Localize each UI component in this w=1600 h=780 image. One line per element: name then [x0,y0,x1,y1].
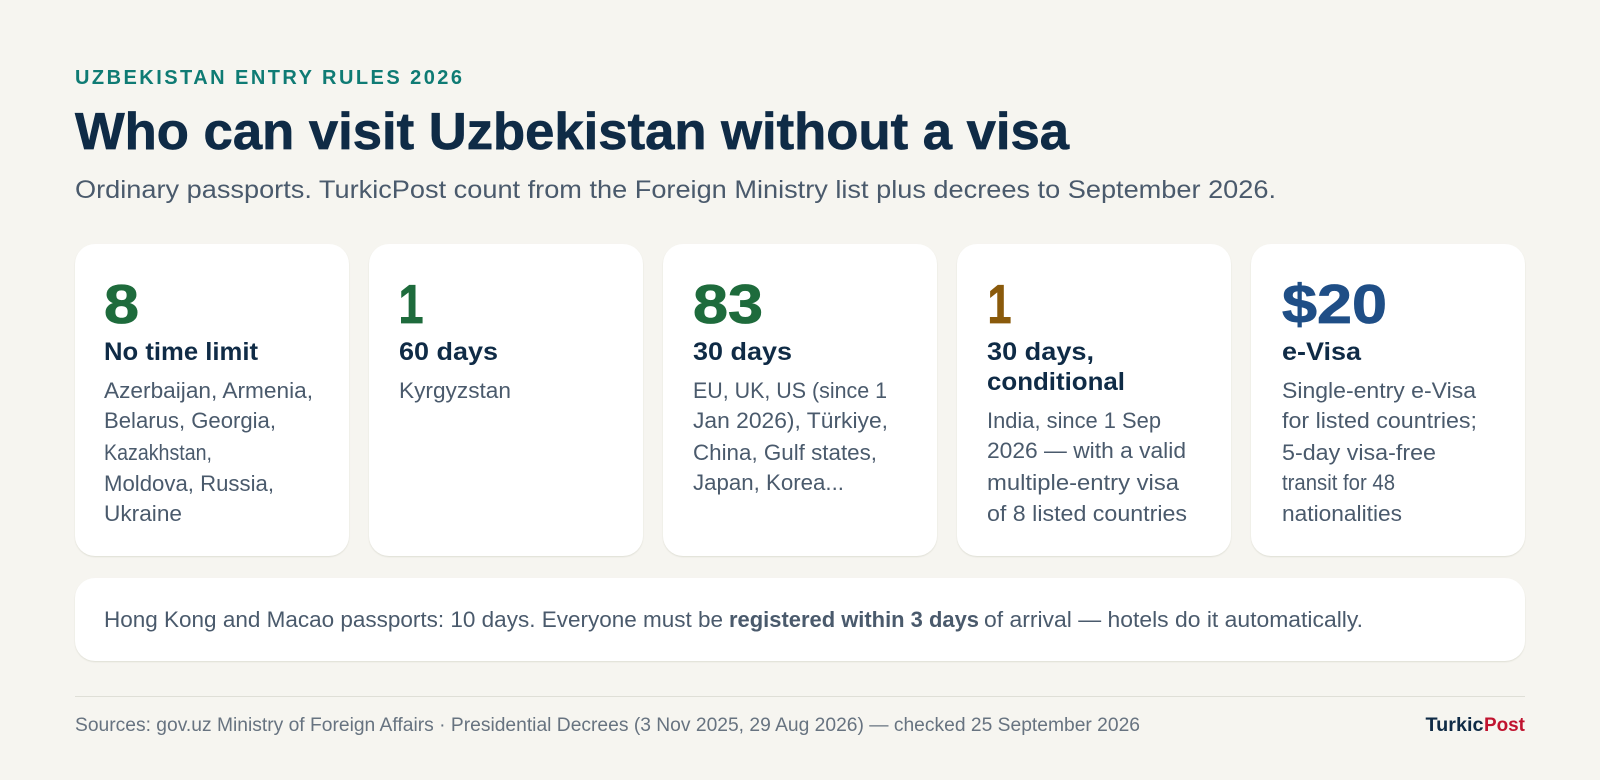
country list: Jan 2026), Türkiye, [693,408,888,433]
stat: 8: 8 [104,273,139,335]
title: Who can visit Uzbekistan without a visa [75,103,1070,161]
note text: registered within 3 days [729,607,979,632]
country list: Japan, Korea... [693,470,844,495]
country list: Belarus, Georgia, [104,408,276,433]
country list [693,378,888,495]
logo: TurkicPost: Turkic [1426,715,1484,736]
e-Visa text [1282,378,1477,526]
panel: 60 days [369,244,643,556]
stat: 1 conditional: 1 [988,273,1012,335]
heading: no time limit: No time limit [104,338,259,366]
heading: 60 days: 60 days [399,338,498,366]
conditions text: India, since 1 Sep [987,408,1161,433]
e-Visa text: transit for 48 [1282,470,1395,495]
note text: Hong Kong and Macao passports: 10 days. Everyone must be [104,607,723,632]
stat: $20: $20 [1282,273,1387,335]
heading: 30 days: 30 days [693,338,792,366]
panel: registration note [75,578,1525,661]
heading: 30 days, conditional [987,338,1125,396]
heading: 30 days, conditional: conditional [987,368,1125,396]
note text [104,607,1363,632]
logo: TurkicPost: Post [1484,715,1526,736]
e-Visa text: nationalities [1282,501,1402,526]
note text: of arrival — hotels do it automatically. [984,607,1363,632]
panel: 30 days conditional [957,244,1231,556]
conditions text: multiple-entry visa [987,470,1180,495]
panel: 30 days [663,244,937,556]
country list: Ukraine [104,501,182,526]
conditions text [987,408,1187,526]
panel: e-Visa [1251,244,1525,556]
country list: Kyrgyzstan [399,378,511,403]
eyebrow: UZBEKISTAN ENTRY RULES 2026 [75,67,462,89]
stat: 1: 1 [398,273,424,335]
country list: China, Gulf states, [693,440,877,465]
stat: 83: 83 [693,273,763,335]
e-Visa text: for listed countries; [1282,408,1477,433]
conditions text: 2026 — with a valid [987,438,1186,463]
subtitle: Ordinary passports. TurkicPost count from the Foreign Ministry list plus decrees to September 2026. [75,176,1276,204]
conditions text: of 8 listed countries [987,501,1187,526]
country list: Moldova, Russia, [104,471,274,496]
e-Visa text: Single-entry e-Visa [1282,378,1477,403]
e-Visa text: 5-day visa-free [1282,440,1436,465]
heading: e-Visa: e-Visa [1282,338,1362,366]
country list [104,378,313,526]
heading: 30 days, conditional: 30 days, [987,338,1094,366]
panel: no time limit [75,244,349,556]
sources: Sources: gov.uz Ministry of Foreign Affairs · Presidential Decrees (3 Nov 2025, 29 Aug 2026) — checked 25 September 2026 [75,715,1140,736]
country list: Azerbaijan, Armenia, [104,378,313,403]
country list: Kazakhstan, [104,440,212,465]
logo: TurkicPost [1426,715,1526,736]
country list: EU, UK, US (since 1 [693,378,887,403]
